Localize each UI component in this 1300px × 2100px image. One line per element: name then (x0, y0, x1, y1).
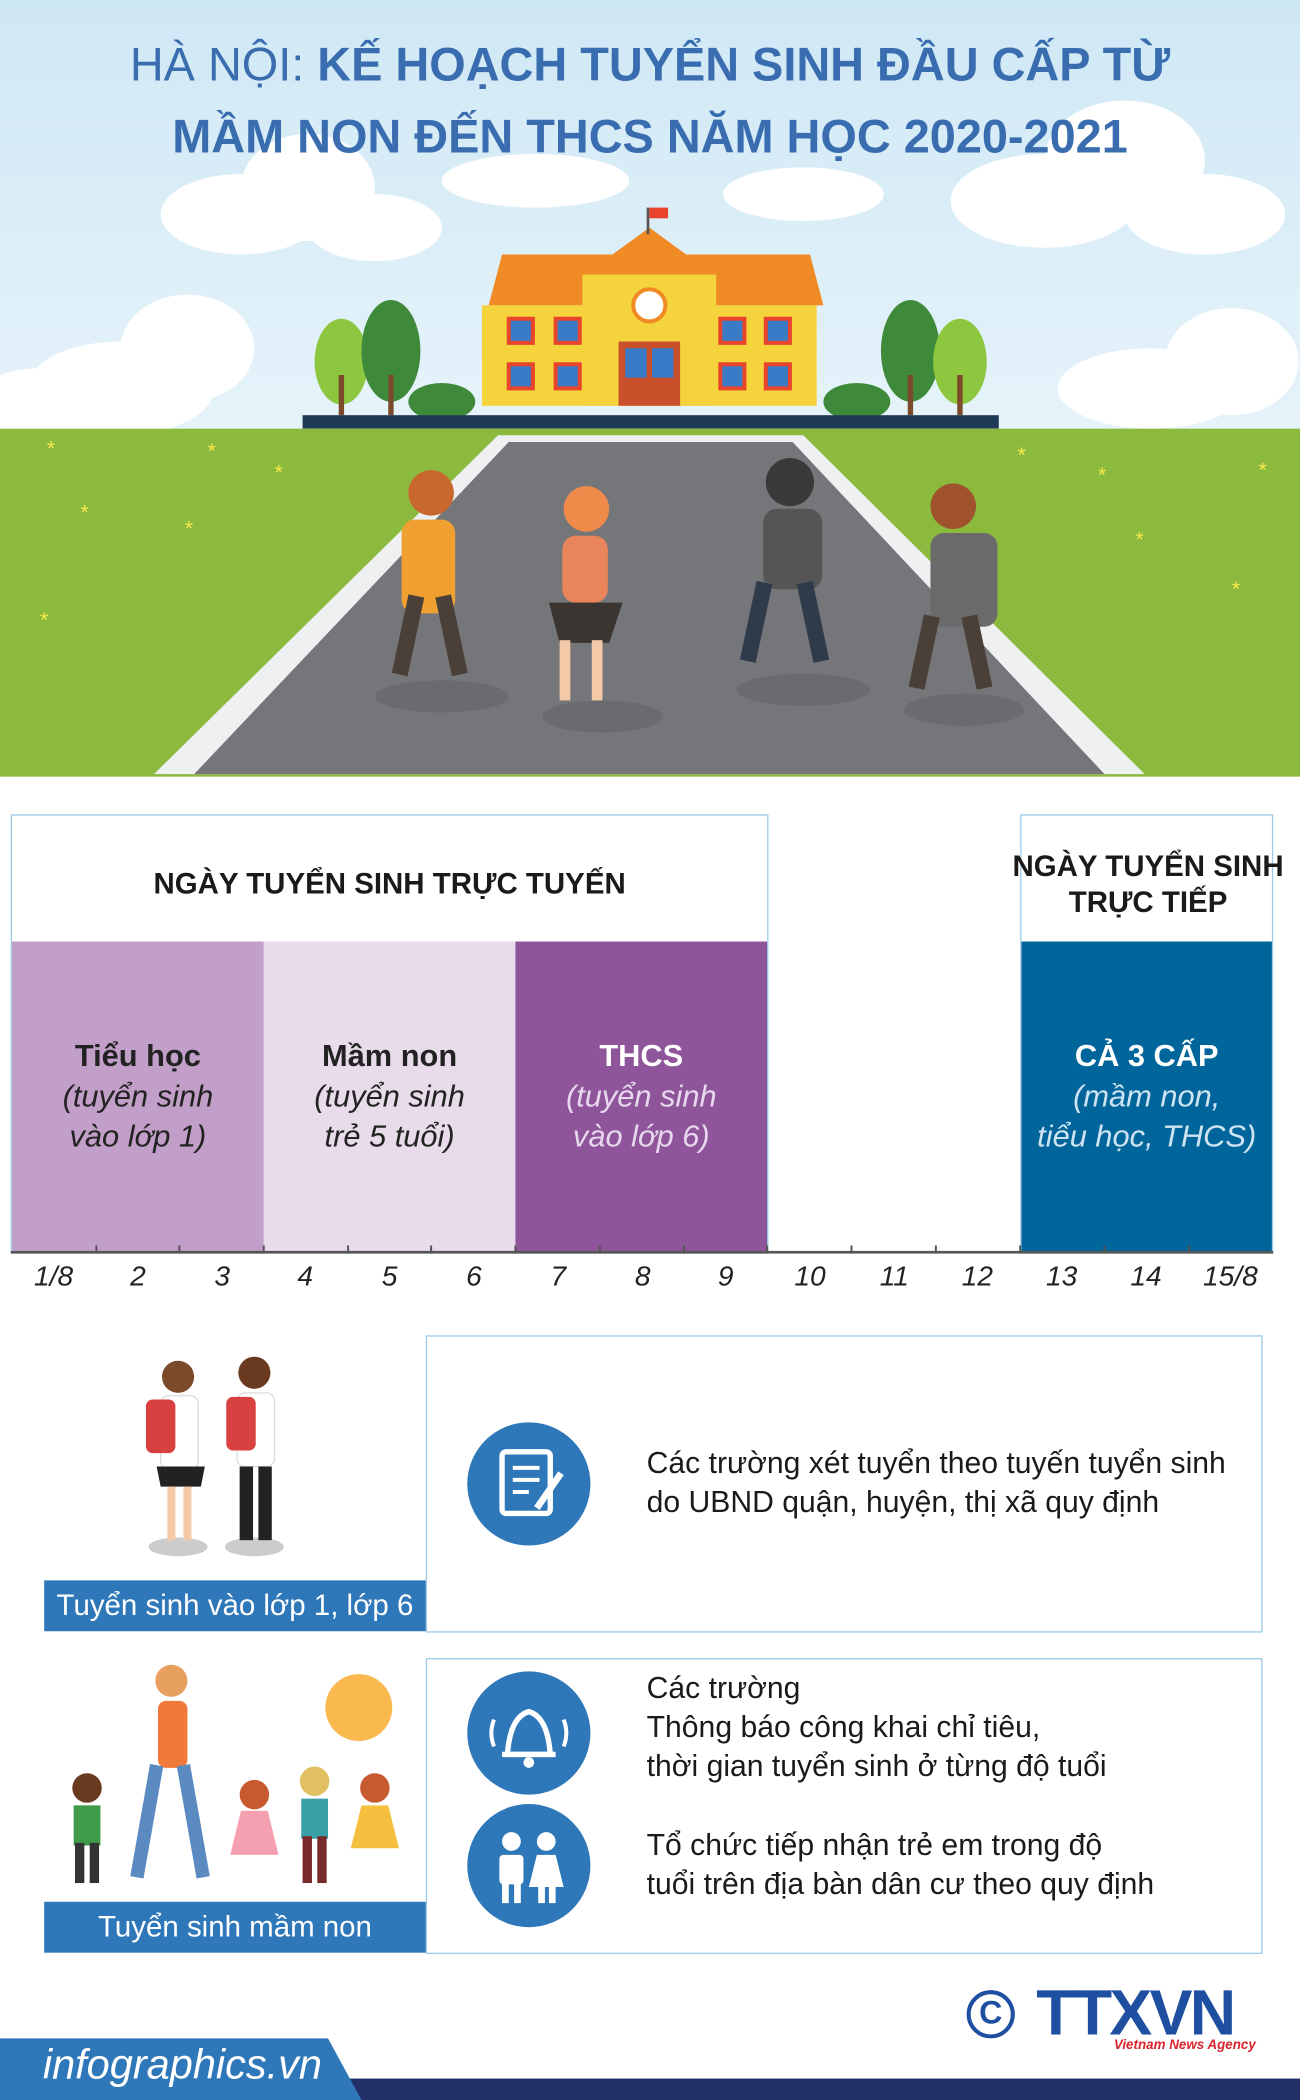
block: all 3 levels: CẢ 3 CẤP (1075, 1038, 1219, 1073)
heading: direct (1012, 849, 1284, 919)
text: 7 (550, 1262, 566, 1292)
text: 3 (214, 1262, 230, 1292)
panel: direct enrolment (1020, 814, 1273, 1254)
block: THCS: (tuyển sinh (566, 1078, 717, 1113)
panel: grade 1 and 6 (426, 1335, 1263, 1633)
title: HÀ NỘI: KẾ HOẠCH TUYỂN SINH ĐẦU CẤP TỪ (130, 39, 1170, 91)
illustration: family (72, 1664, 399, 1884)
label: kindergarten: Tuyển sinh mầm non (98, 1910, 372, 1943)
logo: TTXVN: TTXVN (1036, 1978, 1234, 2049)
text: announcement: Các trường (647, 1671, 800, 1705)
timeline axis (11, 1251, 1273, 1254)
label: kindergarten (44, 1902, 426, 1953)
text: 10 (794, 1262, 826, 1292)
heading: direct: NGÀY TUYỂN SINH (1012, 849, 1284, 883)
text: 8 (635, 1262, 650, 1292)
logo: TTXVN: C (979, 1996, 1002, 2032)
block: all 3 levels (1022, 942, 1272, 1254)
grass and road: * (1098, 463, 1106, 487)
text: 15/8 (1203, 1262, 1258, 1292)
grass and road: * (1135, 527, 1144, 551)
grass and road: * (274, 460, 283, 484)
text: reception (647, 1828, 1154, 1900)
panel: kindergarten (426, 1658, 1263, 1954)
grass and road: * (1259, 458, 1267, 482)
grass and road: * (1232, 577, 1240, 601)
block: mam non: (tuyển sinh (314, 1078, 465, 1113)
text: announcement: Thông báo công khai chỉ tiêu, (647, 1710, 1040, 1744)
text: 5 (382, 1262, 397, 1292)
text: 12 (962, 1262, 993, 1292)
kids (375, 458, 1024, 733)
footer text: infographics.vn (43, 2041, 322, 2088)
block: mam non: trẻ 5 tuổi) (325, 1118, 455, 1153)
icon: bell (467, 1671, 590, 1795)
block: mam non (264, 942, 515, 1254)
block: THCS: THCS (599, 1038, 683, 1073)
logo: TTXVN: Vietnam News Agency (1114, 2038, 1256, 2053)
school illustration (302, 208, 999, 429)
sky background (0, 0, 1300, 431)
illustration: students with backpacks (146, 1356, 284, 1556)
block: tieu hoc: (tuyển sinh (63, 1078, 213, 1113)
title (130, 38, 1170, 163)
panel: online enrolment (11, 814, 768, 1254)
text: reception: tuổi trên địa bàn dân cư theo quy định (647, 1867, 1154, 1900)
label: grade 1 and 6: Tuyển sinh vào lớp 1, lớp 6 (57, 1588, 413, 1622)
block: all 3 levels: (mầm non, (1073, 1078, 1220, 1113)
text: 4 (297, 1262, 313, 1292)
text: 9 (718, 1262, 733, 1292)
timeline labels (34, 1262, 1258, 1292)
block: all 3 levels: tiểu học, THCS) (1037, 1118, 1256, 1153)
block: mam non: Mầm non (322, 1038, 457, 1073)
logo: TTXVN (966, 1978, 1256, 2053)
text: 13 (1046, 1262, 1077, 1292)
text: grade 1/6 rule: Các trường xét tuyển theo tuyến tuyển sinh (647, 1446, 1226, 1480)
grass and road: * (208, 439, 216, 463)
clouds (0, 100, 1299, 429)
icon: document (467, 1422, 590, 1546)
grass and road: * (80, 501, 89, 525)
grass and road: * (1018, 443, 1026, 467)
text: grade 1/6 rule: do UBND quận, huyện, thị xã quy định (647, 1485, 1159, 1519)
text: announcement (647, 1671, 1107, 1783)
text: announcement: thời gian tuyển sinh ở từng độ tuổi (647, 1749, 1107, 1783)
text: 1/8 (34, 1262, 73, 1292)
grass and road: * (40, 608, 49, 632)
text: 11 (880, 1262, 909, 1292)
text: reception: Tổ chức tiếp nhận trẻ em trong độ (647, 1828, 1102, 1862)
text: 6 (466, 1262, 482, 1292)
block: tieu hoc (12, 942, 264, 1254)
icon: children (467, 1804, 590, 1927)
heading: online: NGÀY TUYỂN SINH TRỰC TUYẾN (153, 867, 626, 900)
label: grade 1 and 6 (44, 1580, 426, 1631)
text: 14 (1130, 1262, 1162, 1292)
block: THCS (515, 942, 767, 1254)
block: tieu hoc: Tiểu học (75, 1038, 201, 1073)
heading: direct: TRỰC TIẾP (1069, 885, 1227, 919)
grass and road: * (185, 517, 193, 541)
text: grade 1/6 rule (647, 1446, 1226, 1519)
block: THCS: vào lớp 6) (573, 1118, 710, 1153)
block: tieu hoc: vào lớp 1) (70, 1118, 206, 1153)
footer (0, 2038, 1300, 2100)
grass and road (0, 428, 1300, 777)
text: 2 (130, 1262, 146, 1292)
grass and road: * (47, 436, 55, 460)
title: MẦM NON ĐẾN THCS NĂM HỌC 2020-2021 (172, 111, 1128, 163)
